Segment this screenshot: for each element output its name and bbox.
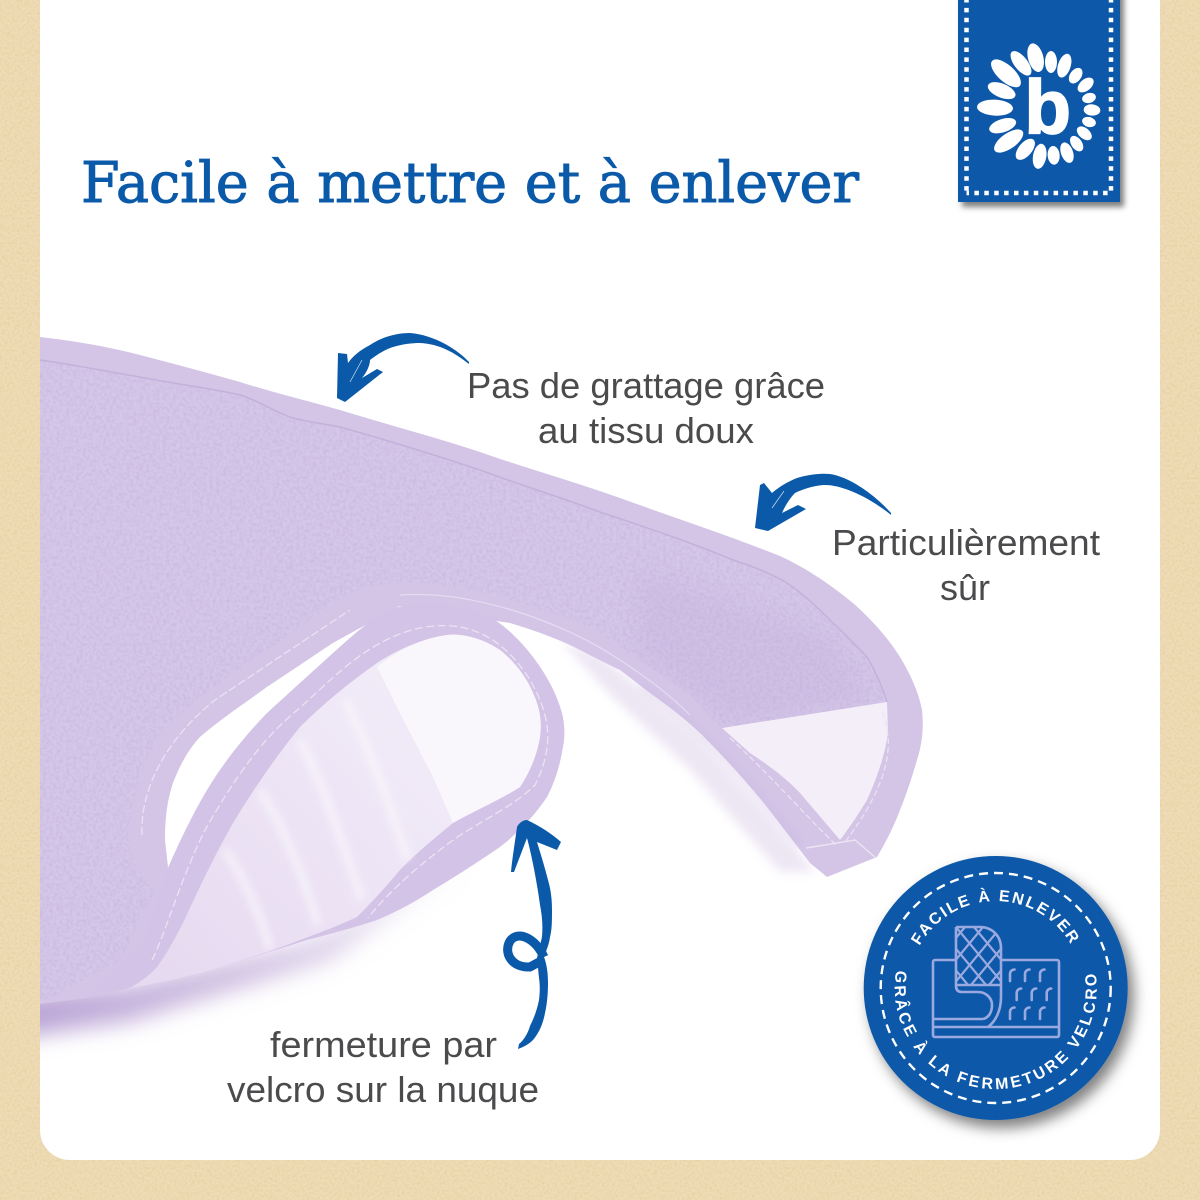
badge velcro icon <box>917 927 1059 1037</box>
logo tag <box>958 0 1120 202</box>
logo letter b: b <box>1024 65 1071 150</box>
terry texture <box>40 330 900 1010</box>
arrow: velcro <box>508 820 561 1049</box>
arrow: soft fabric <box>337 333 469 402</box>
bib shadow <box>0 640 815 1046</box>
strap stitching <box>730 712 888 845</box>
terry cloth <box>40 360 887 1004</box>
text: safety: Particulièrement <box>832 522 1100 563</box>
velcro flap <box>128 606 564 988</box>
text: velcro: fermeture par <box>270 1024 497 1065</box>
white backing triangle on strap <box>722 702 888 840</box>
badge dashed ring <box>881 873 1111 1103</box>
neck opening <box>165 606 400 842</box>
arrow: safety <box>755 474 891 531</box>
bib silhouette with binding <box>40 337 923 1004</box>
title: Facile à mettre et à enlever <box>81 151 859 216</box>
badge <box>860 854 1144 1138</box>
text: velcro: velcro sur la nuque <box>227 1069 539 1110</box>
tag stitching <box>966 0 1113 194</box>
logo flower petals <box>977 42 1101 170</box>
lining folds <box>224 744 412 946</box>
badge text top: FACILE À ENLEVER <box>910 888 1078 945</box>
text: soft fabric <box>467 365 825 451</box>
text: safety <box>832 522 1100 608</box>
flap binding <box>128 606 564 988</box>
text: soft fabric: Pas de grattage grâce <box>467 365 825 406</box>
text: velcro <box>227 1024 539 1110</box>
strap tip fold <box>806 840 876 858</box>
flap stitching <box>152 626 548 960</box>
seam edge <box>40 360 887 702</box>
white terry patch <box>377 635 541 823</box>
badge text bottom: GRÂCE À LA FERMETURE VELCRO <box>894 971 1097 1090</box>
text: safety: sûr <box>940 567 990 608</box>
text: soft fabric: au tissu doux <box>538 410 754 451</box>
strap fold shade <box>640 685 800 846</box>
flap inner lining <box>130 635 541 988</box>
bib photo <box>0 330 923 1046</box>
